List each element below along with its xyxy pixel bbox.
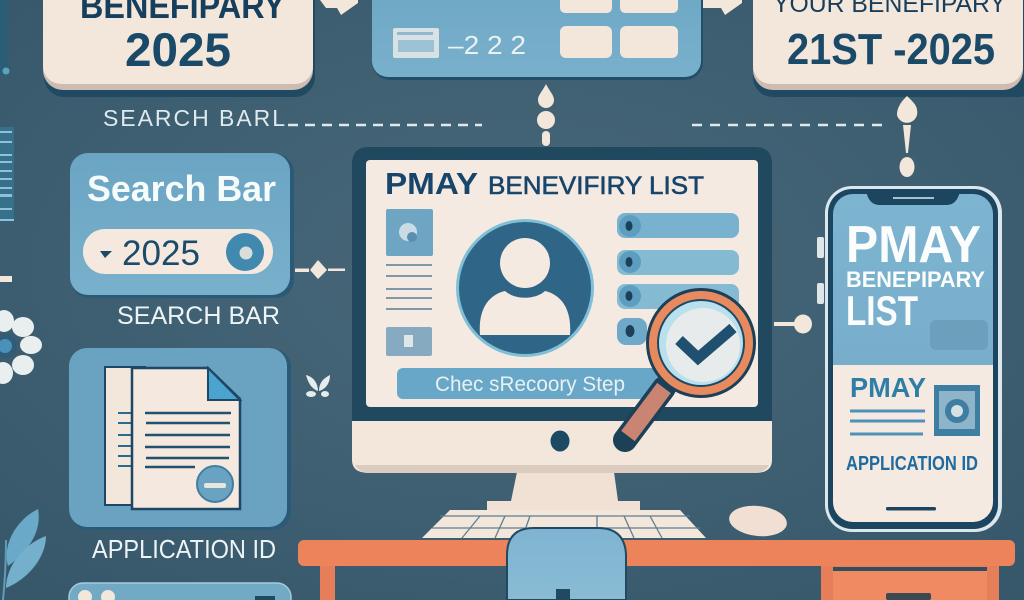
phone home bar [886,507,936,510]
phone title: PMAY [846,216,981,274]
keyboard [422,510,706,538]
dashed connector right [692,124,890,126]
icon: back page [105,367,145,505]
desk [298,540,1015,600]
lower buttons [560,26,678,58]
avatar [456,219,594,357]
screen [366,160,758,407]
label: search bar upper: SEARCH BARL [103,105,285,131]
search input [83,229,273,274]
dashed connector left [288,124,482,126]
sidebar lines [386,265,432,309]
chair [507,528,626,600]
heading: search bar: Search Bar [87,168,276,209]
icon: front page [132,368,240,509]
monitor bezel [352,147,772,421]
monitor stand [487,472,640,510]
connector: search bar to monitor [295,260,345,279]
check recovery bar: Chec sRecoory Step [435,373,625,396]
sidebar lower thumbnail [386,327,432,356]
phone title: LIST [846,287,918,334]
card: top middle form [372,0,703,80]
icon: id card [393,28,439,58]
icon: flower [0,310,42,384]
left edge decoration: list strip [0,0,14,282]
phone body [825,186,1002,532]
arrow: first to second card [320,0,358,15]
screen title [385,166,704,201]
panel: bottom partial card [69,583,291,600]
card: beneficiary 2025 [43,0,315,97]
phone side buttons [817,237,824,304]
connector: drops under middle card [537,84,555,146]
card: your beneficiary [753,0,1024,97]
card: beneficiary 2025: 2025 [125,23,231,76]
search input: 2025 [122,234,200,273]
sidebar thumbnail [386,209,433,256]
phone qr code [934,385,980,436]
label: application id: APPLICATION ID [92,534,276,564]
icon: small butterfly [306,375,330,397]
phone lines [850,411,925,434]
list rows [617,213,739,345]
mouse [728,503,788,539]
connector: monitor to phone [774,314,812,334]
connector: drops under right card [897,96,917,177]
panel: search bar [70,153,294,298]
label: search bar lower: SEARCH BAR [117,302,280,330]
phone title: BENEPIPARY [846,267,985,292]
screen title: PMAY [385,166,478,201]
phone notch [866,191,960,205]
top buttons [560,0,678,13]
phone application id: APPLICATION ID [846,453,978,475]
arrow: second to third card [703,0,742,15]
phone title [846,216,985,334]
panel: application document [69,348,291,530]
icon: leaves [3,509,46,600]
monitor [352,147,772,510]
monitor chin [352,420,772,473]
card: your beneficiary: 21ST -2025 [787,25,995,74]
phone subheading: PMAY [850,372,926,403]
magnifier with check [625,288,756,440]
check recovery bar [397,368,669,399]
text: partial year: –2 2 2 [448,30,526,60]
power button [550,430,570,452]
phone [817,186,1002,532]
screen title: BENEVIFIRY LIST [488,172,704,200]
